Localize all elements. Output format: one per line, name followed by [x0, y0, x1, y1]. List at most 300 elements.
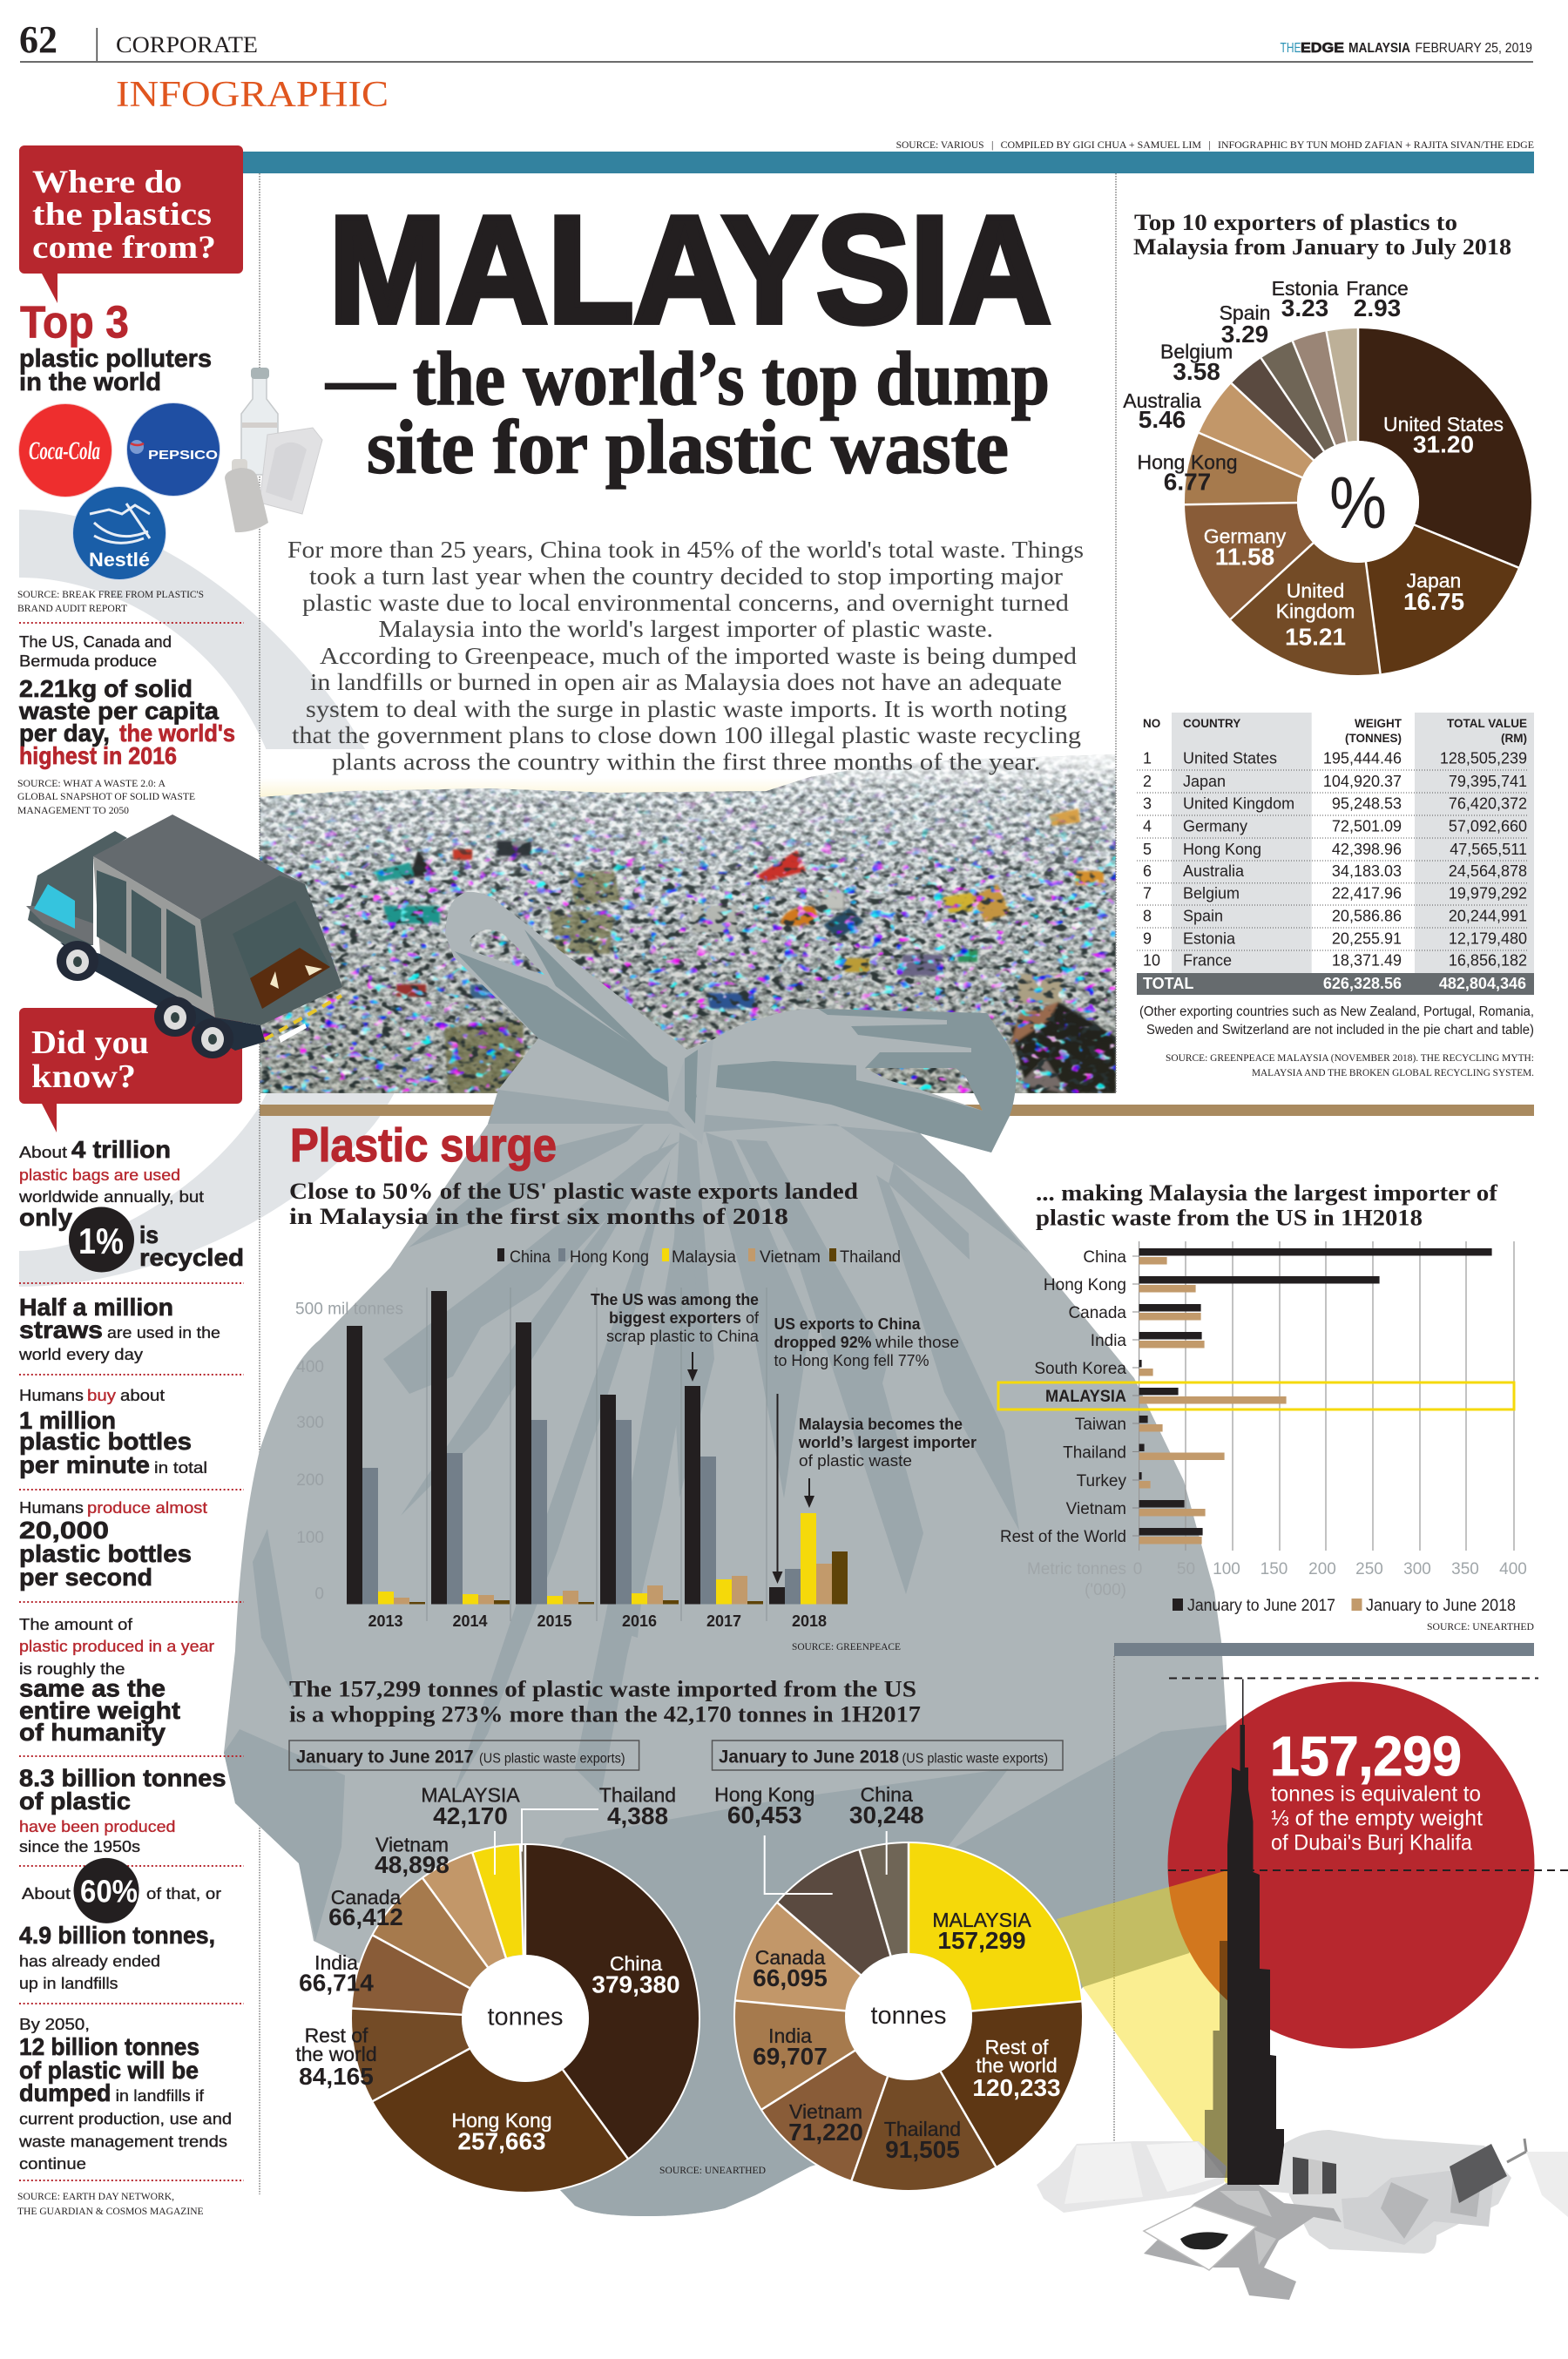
fact: bottles per minute: in total: [154, 1458, 207, 1477]
fact: bottles per minute: about: [120, 1386, 165, 1404]
intro text block: plastic waste due to local environmental concerns, and overnight turned: [302, 590, 1070, 616]
pie labels: 4,388: [607, 1802, 668, 1829]
fact: bottles per second: per second: [19, 1564, 152, 1591]
pie labels: [295, 1784, 680, 2155]
annotation: exports dropped: [774, 1315, 959, 1369]
pie labels: outside names and values: 3.29: [1221, 321, 1268, 348]
credits line: INFOGRAPHIC BY TUN MOHD ZAFIAN + RAJITA SIVAN/THE EDGE: [1218, 139, 1534, 151]
decorative swoosh band behind sidebar: [19, 510, 428, 1287]
table rows: Belgium: [1183, 885, 1240, 902]
icon: Coca-Cola logo: [19, 404, 112, 497]
x axis labels: Metric tonnes: [1027, 1560, 1126, 1578]
pie labels: the world: [976, 2054, 1058, 2077]
table rows: 104,920.37: [1323, 773, 1402, 790]
row labels: Vietnam: [1066, 1500, 1126, 1518]
fact: straws: [18, 1294, 220, 1363]
table note: (Other exporting countries such as New Zealand, Portugal, Romania,: [1139, 1004, 1534, 1019]
table: top 10 exporters: [1137, 713, 1534, 995]
chart legend: January to June 2018: [1366, 1597, 1516, 1615]
table rows: 79,395,741: [1449, 773, 1527, 790]
x axis labels: 250: [1355, 1560, 1383, 1578]
table rows: United Kingdom: [1183, 795, 1294, 813]
annotation: exports dropped: to Hong Kong fell 77%: [774, 1352, 929, 1369]
heading: largest importer: plastic waste from the US in 1H2018: [1036, 1206, 1423, 1230]
source note: what a waste: SOURCE: WHAT A WASTE 2.0: A: [17, 777, 166, 789]
pie labels: 66,412: [328, 1903, 403, 1930]
table rows: 4: [1143, 818, 1152, 835]
fact: weight of humanity: plastic produced in a year: [19, 1637, 214, 1655]
pie labels: [714, 1783, 1061, 2163]
table rows: 42,398.96: [1332, 841, 1402, 858]
pie labels: 120,233: [972, 2074, 1061, 2101]
icon: Coca-Cola logo: Coca-Cola: [29, 436, 100, 465]
source note: earth day: THE GUARDIAN & COSMOS MAGAZINE: [17, 2205, 204, 2217]
pie labels: inside names and values: [1204, 413, 1504, 650]
table rows: 12,179,480: [1449, 930, 1527, 948]
pie labels: 60,453: [727, 1801, 802, 1828]
fact: straws: straws: [19, 1316, 103, 1343]
fact: straws: Half a million: [19, 1294, 173, 1321]
fact: solid waste per capita: waste per capita: [18, 697, 219, 725]
callout bubble: did you know: Did you: [31, 1024, 149, 1061]
callout bubble: where do the plastics come from: [19, 145, 243, 303]
trash: squeezed tube: [1450, 2139, 1526, 2203]
fact: plastic bags: worldwide annually, but: [18, 1187, 204, 1206]
heading: largest importer: [1036, 1180, 1497, 1230]
pie labels: outside names and values: 2.93: [1354, 294, 1401, 321]
pie labels: China: [610, 1952, 662, 1975]
y axis labels: 0: [314, 1585, 324, 1604]
fact: solid waste per capita: The US, Canada and: [19, 632, 172, 651]
source note: what a waste: MANAGEMENT TO 2050: [17, 804, 129, 816]
red circle callout: [1167, 1681, 1535, 2049]
callout text: 157,299 tonnes: 157,299: [1270, 1725, 1462, 1788]
y axis labels: 300: [296, 1414, 324, 1432]
pie labels: 257,663: [457, 2128, 546, 2155]
fact: by 2050: current production, use and: [19, 2110, 232, 2128]
trash: plastic bottle: [1342, 2171, 1494, 2245]
period label box: [713, 1741, 1063, 1770]
x axis years: 2013: [368, 1612, 403, 1630]
bar chart legend: [497, 1248, 901, 1267]
period label box: (US plastic waste exports): [902, 1752, 1048, 1767]
callout text: 157,299 tonnes: of Dubai's Burj Khalifa: [1271, 1831, 1472, 1855]
pie labels: 71,220: [788, 2119, 863, 2146]
pie labels: inside names and values: 31.20: [1413, 430, 1474, 458]
illustration: plastic trash pile: [1037, 2130, 1568, 2300]
intro text block: [287, 537, 1084, 775]
annotation: Malaysia becomes largest importer: [798, 1416, 977, 1470]
subheading: close to 50 percent: [289, 1179, 859, 1229]
table note: Sweden and Switzerland are not included in the pie chart and table): [1146, 1023, 1534, 1038]
fact: bottles per minute: plastic bottles: [19, 1428, 192, 1455]
callout bubble: where do the plastics come from: the plastics: [32, 197, 212, 233]
bars 2017: [685, 1386, 763, 1605]
annotation: biggest exporters: biggest exporters: [609, 1309, 741, 1327]
bar chart: plastic exports by destination 2013-2018: [295, 1288, 848, 1630]
subheading: 157,299 tonnes: is a whopping 273% more than the 42,170 tonnes in 1H2017: [289, 1702, 921, 1727]
table note: [1139, 1004, 1534, 1038]
title: MALAYSIA: MALAYSIA: [329, 185, 1051, 354]
fact: bottles per second: Humans: [19, 1498, 84, 1517]
heading: top 3 plastic polluters: in the world: [19, 368, 161, 396]
x axis years: 2015: [537, 1612, 572, 1630]
pie labels: Hong Kong: [714, 1783, 814, 1806]
table rows: 22,417.96: [1332, 885, 1402, 902]
pie labels: Thailand: [884, 2118, 961, 2140]
dashed height guides: [1168, 1678, 1568, 1870]
pie chart: January to June 2017: tonnes: [487, 2004, 564, 2031]
pie labels: 30,248: [849, 1801, 924, 1828]
masthead: The Edge Malaysia date: EDGE: [1301, 41, 1344, 56]
pie labels: outside names and values: France: [1346, 277, 1409, 300]
table rows: 24,564,878: [1449, 862, 1527, 880]
pie chart: January to June 2017: [289, 1741, 700, 2193]
fact: by 2050: 12 billion tonnes: [19, 2033, 199, 2060]
callout bubble: where do the plastics come from: come from?: [32, 230, 216, 266]
pie labels: Canada: [755, 1946, 825, 1969]
pie chart: top 10 exporters: %: [1329, 462, 1387, 544]
intro text block: Malaysia into the world's largest importer of plastic waste.: [378, 616, 993, 642]
section label: infographic: INFOGRAPHIC: [116, 75, 389, 115]
period label box: (US plastic waste exports): [479, 1752, 625, 1767]
pie chart: January to June 2018: tonnes: [870, 2002, 947, 2030]
leader lines: [765, 1831, 887, 1894]
pie labels: inside names and values: United: [1287, 579, 1344, 602]
pie labels: 48,898: [375, 1851, 449, 1878]
credits line: |: [991, 139, 993, 151]
x axis labels: 0: [1133, 1560, 1142, 1578]
intro text block: system to deal with the surge in plastic waste imports. It is worth noting: [306, 696, 1067, 722]
intro text block: in landfills or burned in open air as Malaysia does not have an adequate: [310, 669, 1062, 695]
yellow projection beam: [1057, 1870, 1227, 2185]
callout bubble: did you know: [19, 1008, 242, 1132]
row labels: Turkey: [1077, 1472, 1126, 1490]
pie labels: Thailand: [599, 1784, 676, 1807]
pie labels: China: [861, 1783, 913, 1806]
fact: sixty percent in landfills: [19, 1858, 221, 1992]
intro text block: According to Greenpeace, much of the imported waste is being dumped: [320, 643, 1078, 669]
arrow: to 2018 china bar: [772, 1394, 782, 1584]
credits line: [896, 139, 1534, 151]
heading: top 3 plastic polluters: [19, 298, 212, 396]
fact: plastic bags: only: [19, 1204, 72, 1231]
table rows: Germany: [1183, 818, 1247, 835]
row labels: Rest of the World: [1000, 1528, 1126, 1546]
fact: billion tonnes produced: [19, 1765, 226, 1855]
pie labels: India: [314, 1951, 358, 1974]
pie labels: inside names and values: Germany: [1204, 524, 1287, 547]
fact: sixty percent in landfills: has already ended: [19, 1951, 160, 1970]
fact: solid waste per capita: 2.21kg of solid: [19, 675, 193, 702]
trash: food tray: [1144, 2206, 1256, 2270]
fact: plastic bags: 4 trillion: [71, 1136, 171, 1163]
bars 2013: [347, 1326, 425, 1605]
table header: [1143, 717, 1527, 745]
fact: weight of humanity: entire weight: [19, 1697, 180, 1724]
source note: unearthed: SOURCE: UNEARTHED: [659, 2164, 766, 2176]
row labels: China: [1083, 1248, 1126, 1267]
bag shading: darker lower folds: [224, 1090, 1227, 2216]
fact: by 2050: [18, 2015, 232, 2173]
trash: crumpled plastic bag: [1144, 2183, 1342, 2300]
row labels: MALAYSIA: [1045, 1388, 1126, 1406]
table rows: Hong Kong: [1183, 841, 1261, 858]
source note: greenpeace malaysia: SOURCE: GREENPEACE MALAYSIA (NOVEMBER 2018). THE RECYCLING MYTH:: [1166, 1051, 1534, 1064]
table rows: Australia: [1183, 862, 1245, 880]
callout text: 157,299 tonnes: ⅓ of the empty weight: [1271, 1807, 1483, 1831]
x axis years: 2014: [452, 1612, 488, 1630]
fact: solid waste per capita: the world's: [119, 720, 235, 747]
table rows: 10: [1143, 952, 1160, 970]
x axis labels: 50: [1177, 1560, 1195, 1578]
table rows: [1143, 750, 1527, 970]
annotation: exports dropped: US exports to China: [774, 1315, 921, 1333]
table total row: 626,328.56: [1323, 975, 1402, 992]
pie labels: outside names and values: Belgium: [1160, 341, 1233, 363]
pie labels: outside names and values: Australia: [1123, 389, 1201, 412]
table rows: Estonia: [1183, 930, 1236, 948]
x axis labels: 200: [1308, 1560, 1336, 1578]
illustration: plastic bottles: [225, 368, 322, 532]
illustration: garbage truck: [26, 814, 342, 1058]
source note: what a waste: [17, 777, 195, 816]
table header: (RM): [1501, 732, 1527, 745]
masthead: The Edge Malaysia date: THE: [1281, 41, 1301, 56]
table rows: 34,183.03: [1332, 862, 1402, 880]
fact: bottles per second: plastic bottles: [19, 1540, 192, 1567]
x axis years: [368, 1612, 827, 1630]
fact: sixty percent in landfills: up in landfills: [19, 1974, 118, 1992]
table rows: 9: [1143, 930, 1152, 948]
fact: bottles per second: produce almost: [87, 1498, 207, 1517]
x axis years: 2017: [706, 1612, 741, 1630]
pie labels: 66,714: [299, 1969, 374, 1997]
subtitle: — the world’s top dump: [325, 337, 1050, 422]
pie labels: 91,505: [885, 2136, 960, 2163]
x axis years: 2016: [622, 1612, 657, 1630]
credits line: SOURCE: VARIOUS: [896, 139, 984, 151]
table rows: 195,444.46: [1323, 750, 1402, 767]
trash: food container: [1037, 2141, 1227, 2213]
fact: sixty percent in landfills: About: [22, 1884, 71, 1903]
table rows: 57,092,660: [1449, 818, 1527, 835]
chart legend: [1173, 1597, 1516, 1615]
table rows: 16,856,182: [1449, 952, 1527, 970]
table rows: Spain: [1183, 908, 1223, 925]
pie labels: MALAYSIA: [421, 1784, 520, 1807]
bars 2018: [769, 1513, 848, 1605]
credits line: |: [1209, 139, 1211, 151]
heading: top 10 exporters: Malaysia from January to July 2018: [1133, 234, 1511, 260]
pie labels: inside names and values: Japan: [1407, 570, 1461, 592]
bar chart legend: Thailand: [840, 1248, 901, 1267]
fact: plastic bags: is: [139, 1221, 159, 1248]
header: page number and section: 62: [19, 18, 57, 61]
fact: by 2050: dumped: [19, 2079, 112, 2106]
source note: brand audit: SOURCE: BREAK FREE FROM PLASTIC'S: [17, 588, 204, 600]
bars 2016: [600, 1395, 679, 1605]
fact: solid waste per capita: [18, 632, 235, 769]
x axis labels: ('000): [1085, 1581, 1126, 1599]
intro text block: For more than 25 years, China took in 45% of the world's total waste. Things: [287, 537, 1084, 563]
fact: bottles per minute: Humans: [19, 1386, 84, 1404]
pie labels: Rest of: [305, 2024, 368, 2047]
fact: billion tonnes produced: of plastic: [19, 1788, 131, 1815]
table total row: 482,804,346: [1439, 975, 1526, 992]
pie labels: 42,170: [433, 1802, 508, 1829]
fact: weight of humanity: is roughly the: [19, 1659, 125, 1678]
arrow: to 2017 bar: [687, 1352, 698, 1382]
pie labels: outside names and values: 5.46: [1139, 406, 1186, 433]
fact: bottles per minute: [19, 1386, 207, 1478]
pie labels: Hong Kong: [451, 2109, 552, 2132]
intro text block: took a turn last year when the country decided to stop importing major: [309, 563, 1063, 589]
fact: straws: world every day: [18, 1345, 144, 1363]
annotation: biggest exporters: The US was among the: [591, 1291, 759, 1308]
Malaysia highlight box: [998, 1382, 1514, 1409]
fact: solid waste per capita: highest in 2016: [19, 742, 177, 769]
pie labels: Vietnam: [375, 1833, 449, 1855]
trash: plastic cup: [1256, 2151, 1336, 2194]
fact: plastic bags: [18, 1136, 244, 1272]
dotted red dividers: [19, 623, 244, 2180]
arrow: to 2018 Malaysia bar: [804, 1478, 814, 1508]
fact: billion tonnes produced: since the 1950s: [19, 1837, 140, 1855]
pie labels: India: [768, 2024, 812, 2047]
x axis labels: 300: [1403, 1560, 1431, 1578]
pie labels: outside names and values: 3.58: [1173, 358, 1220, 385]
bag handle: left ear folds: [455, 929, 669, 1102]
table rows: 1: [1143, 750, 1152, 767]
pie chart: January to June 2018: [713, 1741, 1083, 2191]
trash: wrapper on right edge: [1526, 2152, 1568, 2217]
credits line: COMPILED BY GIGI CHUA + SAMUEL LIM: [1001, 139, 1201, 151]
table header: WEIGHT: [1355, 717, 1402, 730]
fact: weight of humanity: [19, 1615, 214, 1746]
table total row: [1137, 973, 1534, 995]
masthead: The Edge Malaysia date: FEBRUARY 25, 2019: [1415, 41, 1532, 56]
photo: landfill of plastic waste: [260, 749, 1116, 1093]
pie labels: the world: [295, 2043, 377, 2065]
heading: top 10 exporters: [1133, 210, 1511, 260]
annotation: exports dropped: dropped 92%: [774, 1334, 871, 1351]
period label box: January to June 2017: [296, 1747, 474, 1768]
period label box: [289, 1741, 639, 1770]
pie labels: outside names and values: [1123, 277, 1409, 496]
fact: weight of humanity: same as the: [19, 1675, 166, 1702]
pie labels: 84,165: [299, 2063, 374, 2090]
callout bubble: where do the plastics come from: Where do: [32, 165, 182, 200]
subtitle: [325, 337, 1050, 490]
illustration: plastic garbage bag: [224, 892, 1227, 2216]
pie labels: inside names and values: 16.75: [1403, 588, 1464, 615]
source note: greenpeace: SOURCE: GREENPEACE: [792, 1640, 901, 1653]
fact: weight of humanity: of humanity: [19, 1719, 166, 1746]
header: page number and section: [19, 18, 1533, 63]
pie labels: outside names and values: Hong Kong: [1137, 451, 1238, 474]
pie labels: 69,707: [753, 2043, 828, 2070]
pie labels: inside names and values: 11.58: [1215, 544, 1274, 571]
pie labels: Vietnam: [789, 2100, 862, 2123]
table header: TOTAL VALUE: [1447, 717, 1527, 730]
fact: bottles per minute: 1 million: [19, 1407, 116, 1434]
source note: greenpeace malaysia: MALAYSIA AND THE BROKEN GLOBAL RECYCLING SYSTEM.: [1252, 1066, 1534, 1078]
teal header bar: [242, 152, 1534, 173]
pie labels: MALAYSIA: [932, 1909, 1031, 1931]
table rows: 8: [1143, 908, 1152, 925]
pie labels: inside names and values: 15.21: [1285, 624, 1346, 650]
table rows: 3: [1143, 795, 1152, 813]
table rows: 20,586.86: [1332, 908, 1402, 925]
y axis labels: 200: [296, 1471, 324, 1490]
pie labels: inside names and values: United States: [1383, 413, 1504, 436]
slate header bar: [1114, 1643, 1534, 1656]
table rows: 6: [1143, 862, 1152, 880]
y axis labels: 100: [296, 1529, 324, 1547]
source note: unearthed: SOURCE: UNEARTHED: [1427, 1620, 1534, 1632]
x axis labels: 150: [1260, 1560, 1288, 1578]
row labels: Thailand: [1063, 1444, 1126, 1462]
y axis labels: [295, 1300, 403, 1604]
header: page number and section: CORPORATE: [116, 32, 258, 57]
heading: top 3 plastic polluters: Top 3: [20, 298, 129, 348]
fact: billion tonnes produced: have been produced: [19, 1817, 176, 1835]
fact: bottles per minute: per minute: [19, 1451, 150, 1478]
callout text: 157,299 tonnes: tonnes is equivalent to: [1271, 1782, 1481, 1807]
trash: puddle: [1284, 2130, 1511, 2254]
callout bubble: did you know: know?: [31, 1058, 136, 1095]
fact: by 2050: in landfills if: [116, 2086, 205, 2105]
fact: plastic bags: plastic bags are used: [19, 1166, 180, 1184]
source note: earth day: [17, 2190, 204, 2217]
column dotted rules: [260, 173, 1116, 2194]
table rows: Japan: [1183, 773, 1226, 790]
bars 2014: [431, 1291, 510, 1605]
subtitle: site for plastic waste: [367, 406, 1009, 490]
masthead: The Edge Malaysia date: [1281, 41, 1532, 56]
table rows: France: [1183, 952, 1232, 970]
x axis labels: 100: [1213, 1560, 1240, 1578]
chart legend: January to June 2017: [1187, 1597, 1335, 1615]
table rows: 47,565,511: [1450, 841, 1527, 858]
row labels: Taiwan: [1075, 1416, 1126, 1434]
x axis labels: [1027, 1560, 1527, 1599]
fact: bottles per minute: buy: [87, 1386, 117, 1404]
fact: plastic bags: About: [19, 1143, 67, 1161]
table rows: 18,371.49: [1332, 952, 1402, 970]
table total row: TOTAL: [1143, 975, 1193, 992]
icon: PepsiCo logo: [127, 402, 220, 497]
table rows: 72,501.09: [1332, 818, 1402, 835]
period label box: January to June 2018: [719, 1747, 899, 1768]
annotation: biggest exporters: scrap plastic to China: [606, 1328, 760, 1345]
table rows: 7: [1143, 885, 1152, 902]
pie labels: 157,299: [937, 1927, 1026, 1954]
row labels: Canada: [1068, 1304, 1126, 1322]
source note: brand audit: [17, 588, 204, 614]
pie labels: 379,380: [591, 1971, 680, 1998]
bar chart legend: China: [510, 1248, 551, 1267]
fact: by 2050: By 2050,: [19, 2015, 90, 2033]
fact: sixty percent in landfills: of that, or: [146, 1884, 221, 1903]
pie labels: Rest of: [985, 2036, 1049, 2058]
pie labels: inside names and values: Kingdom: [1276, 599, 1355, 622]
row labels: South Korea: [1034, 1360, 1126, 1378]
row labels: India: [1091, 1332, 1126, 1350]
annotation: Malaysia becomes largest importer: world’s largest importer: [798, 1434, 977, 1451]
table rows: 76,420,372: [1449, 795, 1527, 813]
